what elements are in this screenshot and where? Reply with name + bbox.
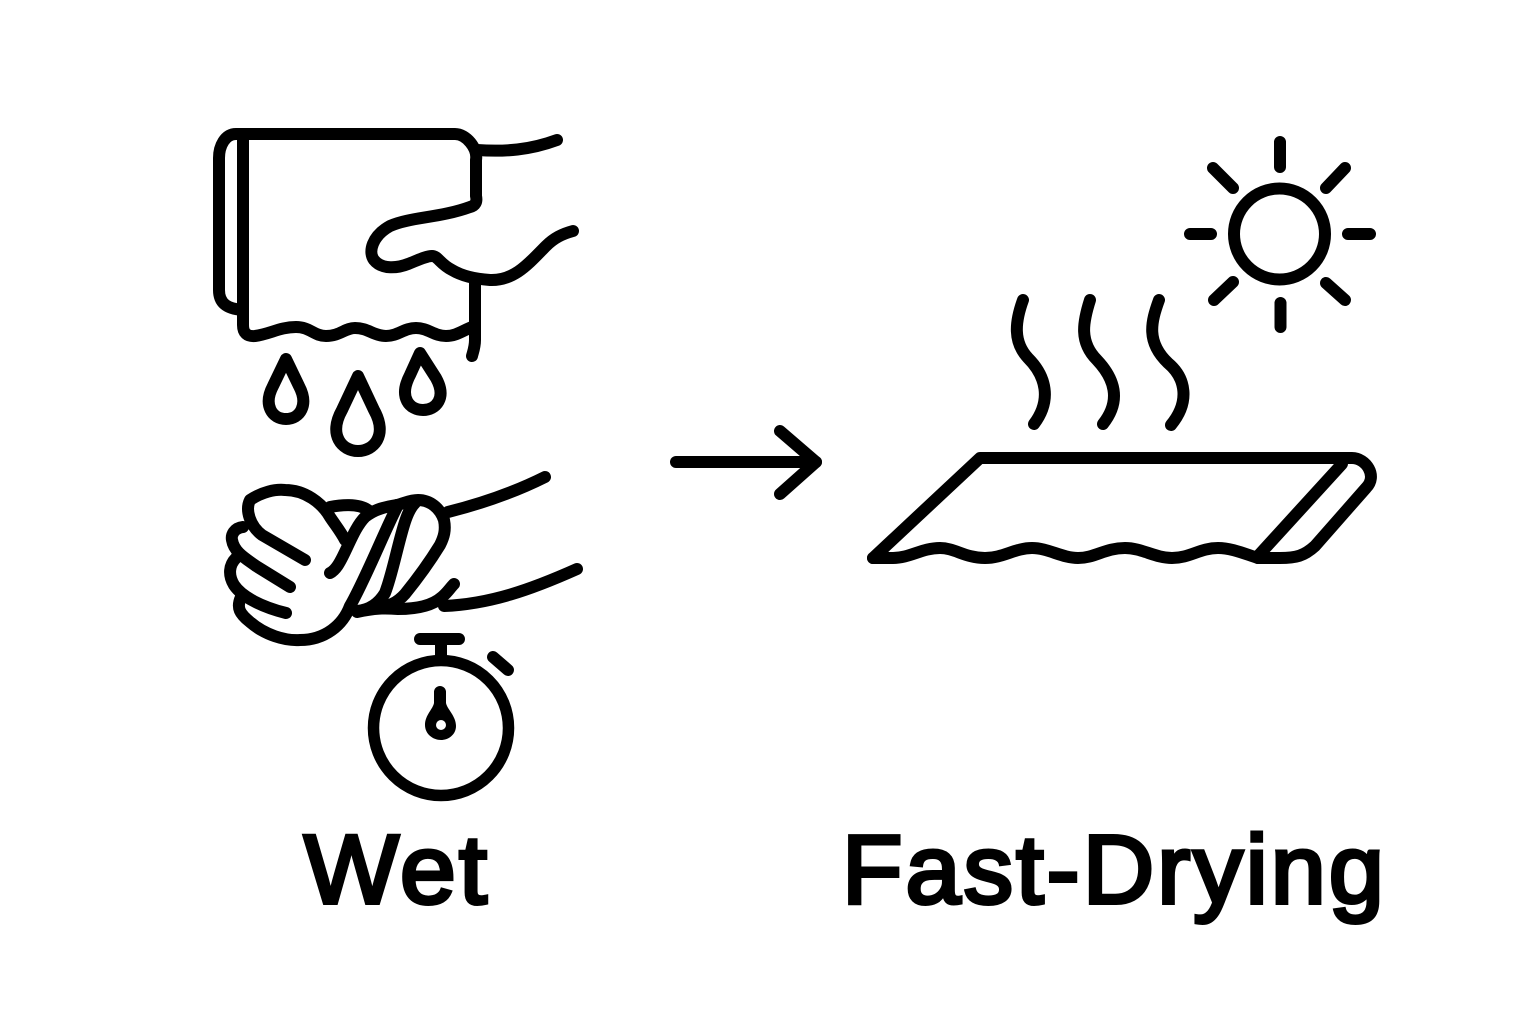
icon: hand wringing wet towel [219, 134, 573, 356]
stopwatch stem [435, 640, 447, 662]
stopwatch hand [425, 686, 456, 740]
wrist upper line [477, 140, 557, 151]
icon: flat drying towel [873, 458, 1371, 558]
forearm lower line [444, 569, 577, 606]
towel fold line [1258, 464, 1342, 556]
towel body [243, 136, 472, 336]
towel right hanging edge [472, 280, 475, 356]
label: Wet: Wet [304, 815, 490, 924]
finger three [230, 558, 286, 613]
finger two [232, 527, 290, 587]
drop right [405, 353, 441, 410]
stopwatch hand pivot [436, 720, 446, 730]
icon: clasped hand squeezing [230, 477, 577, 640]
arrow [676, 431, 816, 494]
forearm upper line [448, 477, 545, 512]
thumb outline [248, 490, 345, 560]
wrapped strand hook [330, 505, 397, 573]
icon: water drops [269, 353, 441, 451]
wrist fold [357, 584, 454, 612]
towel wavy bottom [873, 548, 1258, 558]
finger four and palm [239, 507, 397, 640]
stopwatch side button [493, 657, 508, 670]
stopwatch cap [420, 633, 459, 645]
icon: steam lines [1017, 300, 1183, 425]
towel fold and top edge [243, 134, 573, 280]
label: Fast-Drying: Fast-Drying [842, 815, 1387, 924]
top knuckle strand [330, 505, 368, 510]
sun disc [1234, 188, 1325, 280]
drop left [269, 359, 303, 419]
wrapped finger outer [380, 500, 445, 607]
inner diagonal strand [357, 503, 415, 611]
stopwatch dial [374, 660, 508, 796]
towel outline [873, 458, 1371, 558]
drop center [336, 376, 380, 451]
sun rays [1190, 142, 1370, 327]
towel left roll [219, 134, 243, 310]
icon: stopwatch [374, 639, 508, 796]
icon: sun [1190, 142, 1370, 327]
